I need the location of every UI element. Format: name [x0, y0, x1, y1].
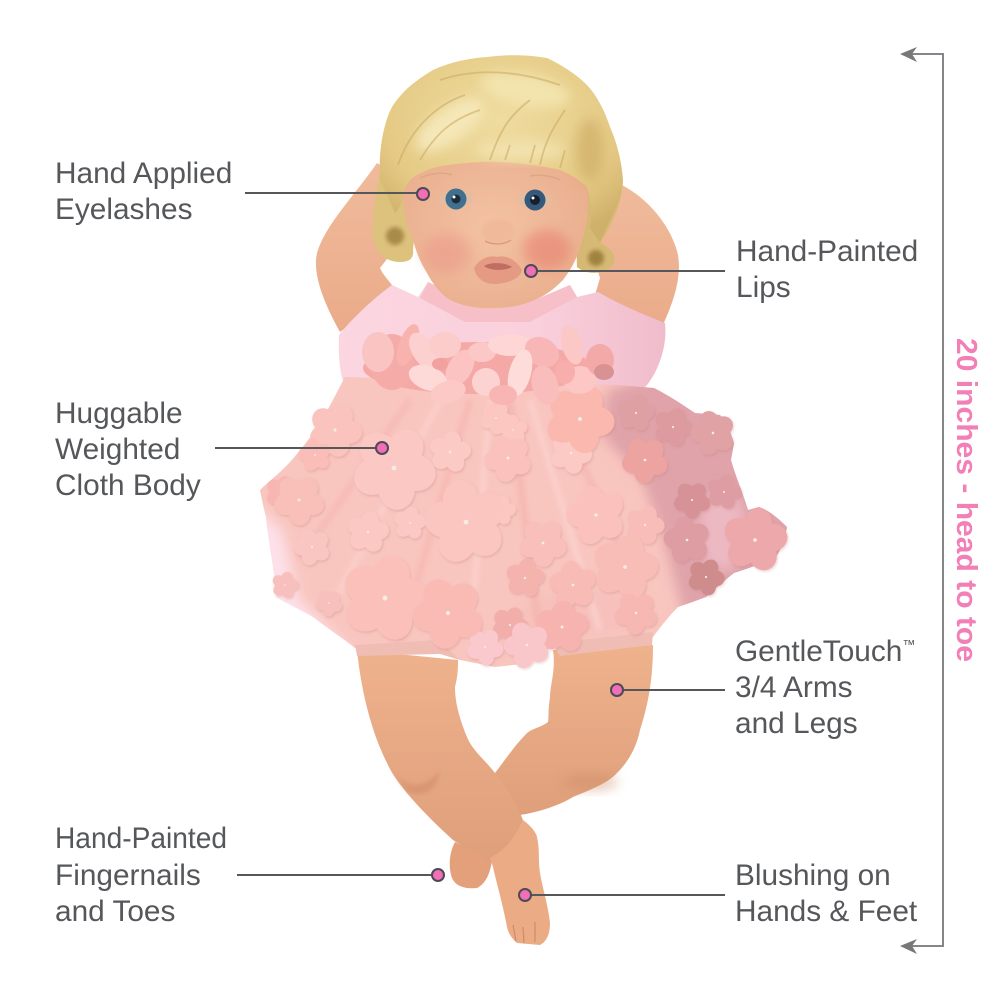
skirt petals: [259, 372, 795, 681]
callout: GentleTouch 3/4 Arms and Legs: ™: [902, 637, 915, 652]
callout: GentleTouch 3/4 Arms and Legs: [611, 635, 915, 740]
skirt shading and pleats: [250, 375, 800, 655]
doll hair: [380, 55, 623, 243]
callout: Hand-Painted Lips: [525, 235, 918, 304]
callout: Blushing on Hands and Feet: Hands & Feet: [735, 895, 918, 928]
callout: Huggable Weighted Cloth Body: [55, 397, 388, 502]
doll arms behind head: [316, 163, 679, 332]
callout: Hand-Painted Fingernails and Toes: [55, 822, 444, 928]
doll hair back curls: [373, 170, 623, 273]
callout: Hand Applied Eyelashes: Eyelashes: [55, 193, 192, 226]
doll legs and feet: [357, 645, 653, 945]
doll face: [403, 150, 588, 308]
callout: Huggable Weighted Cloth Body: Cloth Body: [55, 469, 201, 502]
callout: Hand-Painted Fingernails and Toes: and Toes: [55, 895, 175, 928]
skirt body: [260, 377, 787, 667]
callout: Blushing on Hands and Feet: [519, 859, 918, 928]
callout: Huggable Weighted Cloth Body: Weighted: [55, 433, 180, 466]
callout: Huggable Weighted Cloth Body: Huggable: [55, 397, 183, 430]
doll dress: [250, 282, 800, 681]
callout: GentleTouch 3/4 Arms and Legs: GentleTouch: [735, 635, 902, 668]
doll illustration: [250, 55, 800, 945]
callout: GentleTouch 3/4 Arms and Legs: and Legs: [735, 707, 858, 740]
callout: Hand-Painted Lips: Hand-Painted: [736, 235, 918, 268]
waist roses: [362, 321, 614, 408]
callout: Hand Applied Eyelashes: Hand Applied: [55, 157, 232, 190]
height label: 20 inches - head to toe: [950, 338, 982, 662]
callout: Hand-Painted Fingernails and Toes: Fingernails: [55, 859, 201, 892]
callout: GentleTouch 3/4 Arms and Legs: 3/4 Arms: [735, 671, 853, 704]
callout: Blushing on Hands and Feet: Blushing on: [735, 859, 891, 892]
callout: Hand-Painted Lips: Lips: [736, 271, 791, 304]
height bracket arrow: [900, 47, 943, 954]
bloomer bands: [355, 640, 460, 660]
callout: Hand-Painted Fingernails and Toes: Hand-Painted: [55, 822, 227, 855]
callout: Hand Applied Eyelashes: [55, 157, 429, 226]
